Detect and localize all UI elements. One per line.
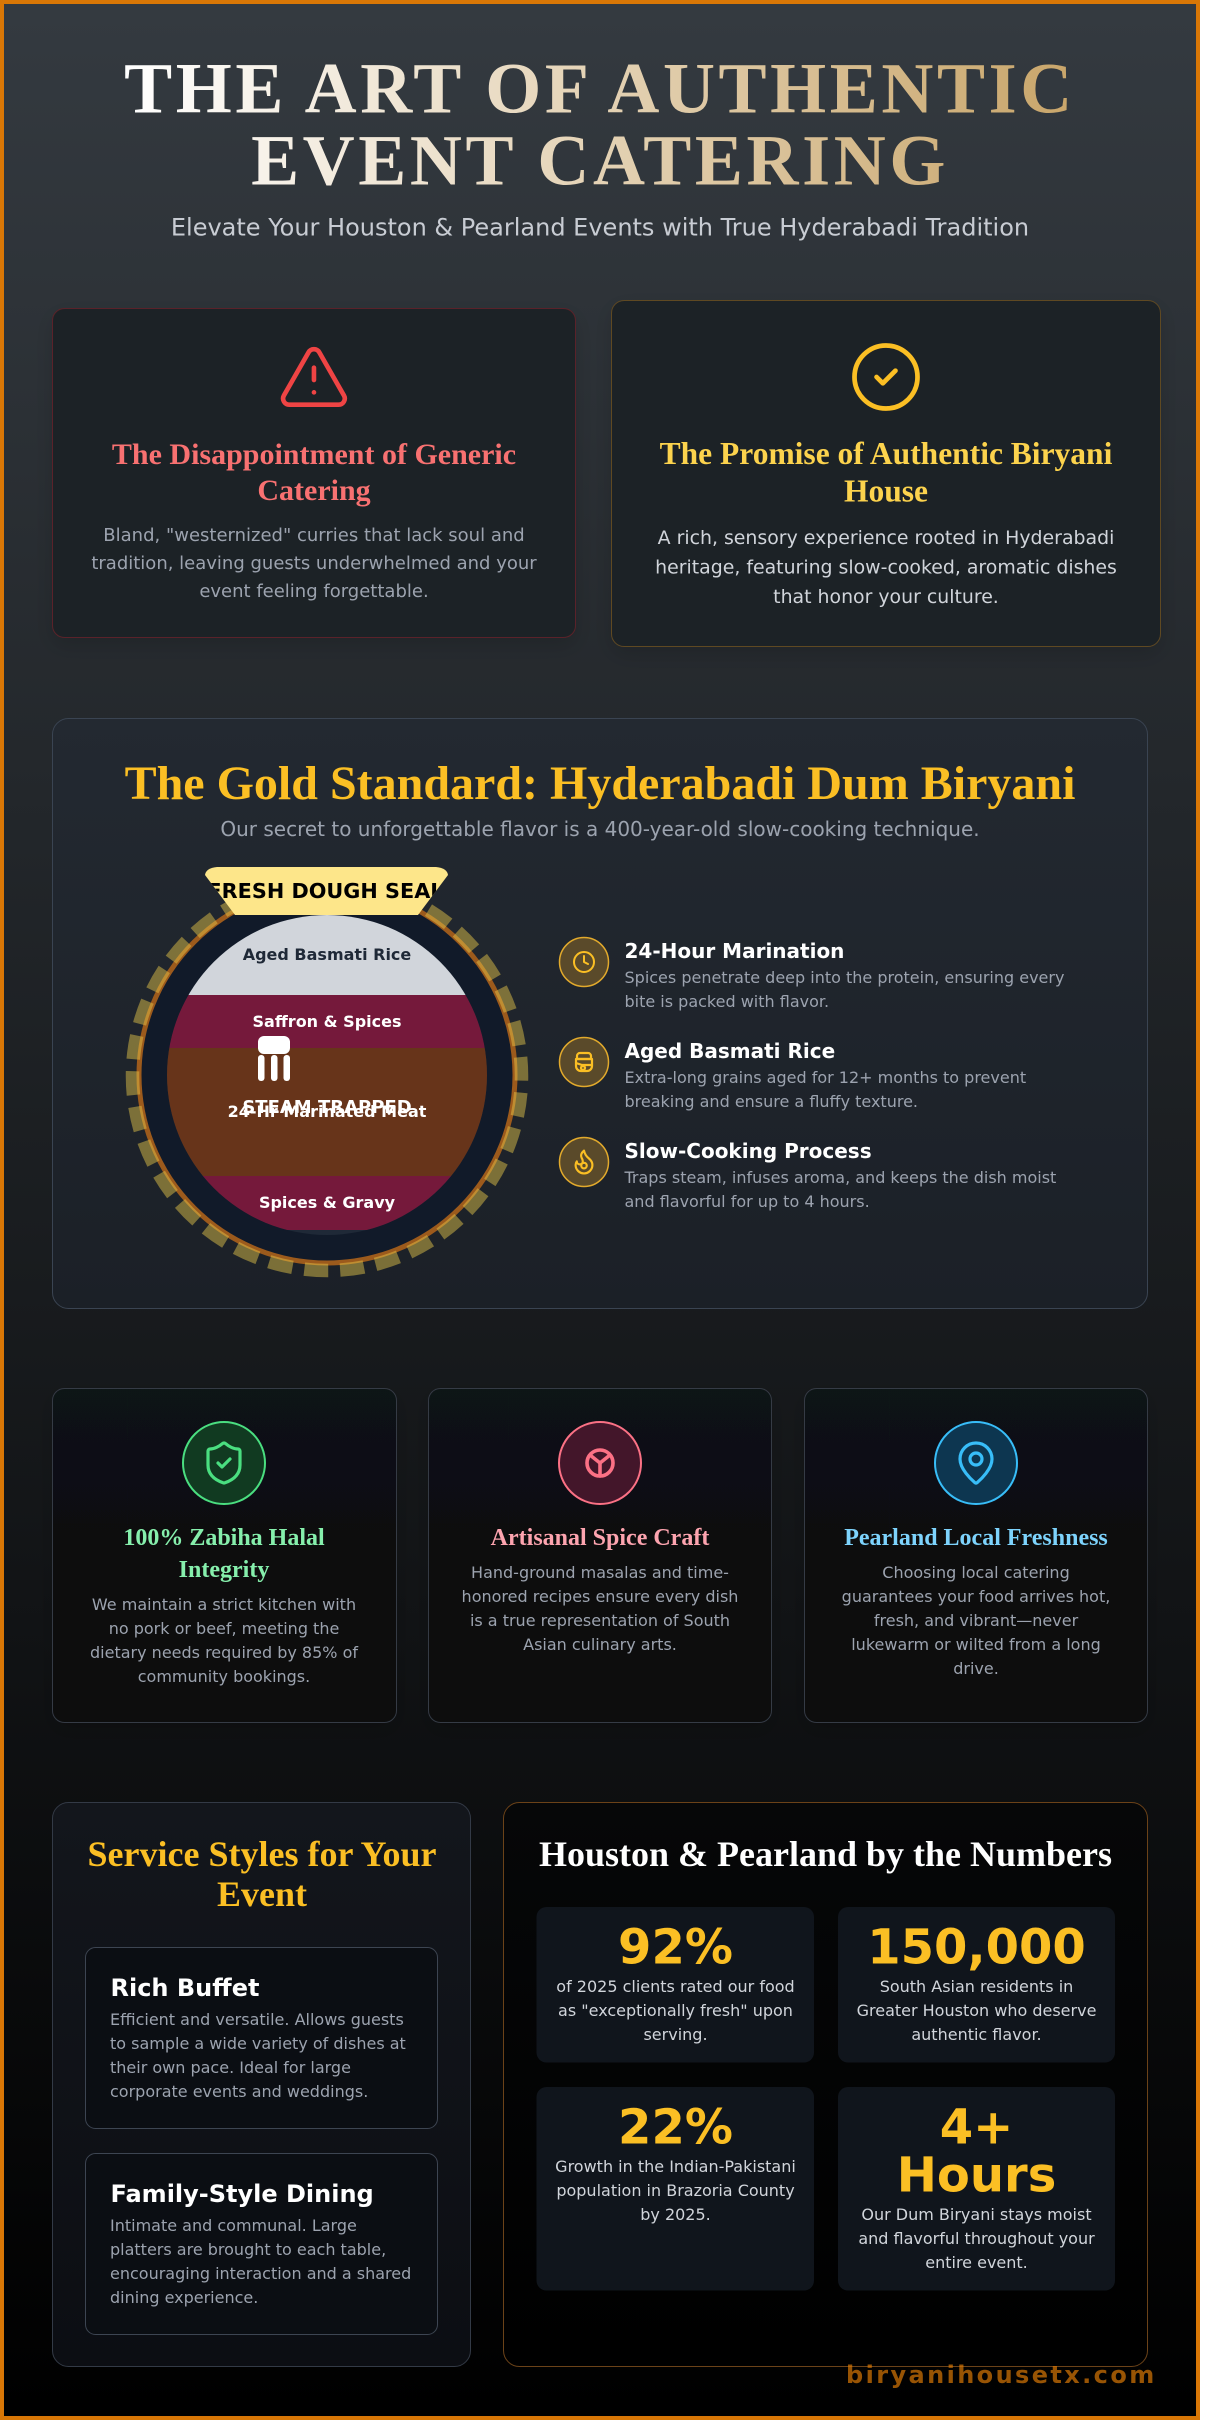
layer label: saffron: Saffron & Spices [253, 1012, 401, 1031]
stat: 22%: Growth in the Indian-Pakistani [555, 2157, 796, 2176]
icon: spice [559, 1422, 641, 1504]
heading: service styles: Event [217, 1874, 307, 1914]
icon: steam [258, 1036, 290, 1081]
stat: 150,000: Greater Houston who deserve [857, 2001, 1096, 2020]
label: steam trapped: STEAM TRAPPED [242, 1097, 412, 1118]
feature title: Slow-Cooking Process [624, 1139, 872, 1163]
layer label: gravy: Spices & Gravy [259, 1193, 396, 1212]
card: family-style dining: Family-Style Dining [110, 2180, 374, 2208]
card: family-style dining: encouraging interaction and a shared [110, 2264, 411, 2283]
stat: 22%: 22% [618, 2100, 733, 2156]
feature text: bite is packed with flavor. [624, 992, 829, 1011]
stat: 92%: of 2025 clients rated our food [556, 1977, 795, 1996]
stat: 92%: 92% [618, 1920, 733, 1976]
food layers [167, 915, 487, 1235]
heading: service styles: Service Styles for Your [88, 1834, 436, 1874]
layer label: rice: Aged Basmati Rice [243, 945, 411, 964]
stat: 4+ hours [838, 2087, 1115, 2290]
text: spice body: Hand-ground masalas and time- [471, 1563, 729, 1582]
feature text: Spices penetrate deep into the protein, ensuring every [624, 968, 1064, 987]
heading: disappointment: The Disappointment of Generic [112, 438, 516, 471]
card: family-style dining: Intimate and communal. Large [110, 2216, 357, 2235]
text: halal body: community bookings. [138, 1667, 310, 1686]
icon: map pin [935, 1422, 1017, 1504]
feature: slow-cooking process [560, 1138, 1056, 1211]
feature title: 24-Hour Marination [624, 939, 844, 963]
text: freshness body: lukewarm or wilted from a long [851, 1635, 1101, 1654]
text: freshness body: guarantees your food arrives hot, [842, 1587, 1110, 1606]
feature: 24-hour marination [560, 938, 1064, 1011]
heading: gold standard: The Gold Standard: Hyderabadi Dum Biryani [125, 757, 1075, 810]
diagram: biryani pot cross-section [132, 867, 522, 1270]
text: freshness body: fresh, and vibrant—never [874, 1611, 1079, 1630]
text: promise body: heritage, featuring slow-cooked, aromatic dishes [655, 556, 1117, 578]
heading: promise: The Promise of Authentic Biryani [660, 436, 1113, 471]
stat: 4+ hours: and flavorful throughout your [858, 2229, 1095, 2248]
feature: aged basmati rice [560, 1038, 1026, 1111]
stat: 150,000 [838, 1907, 1115, 2062]
icon: rice bowl [560, 1038, 608, 1086]
dough seal: FRESH DOUGH SEAL [207, 879, 444, 903]
heading: freshness: Pearland Local Freshness [844, 1525, 1108, 1551]
icon: clock [560, 938, 608, 986]
text: disappointment body: Bland, "westernized" curries that lack soul and [103, 525, 525, 546]
text: halal body: no pork or beef, meeting the [109, 1619, 339, 1638]
text: spice body: honored recipes ensure every dish [462, 1587, 738, 1606]
panel: houston and pearland by the numbers [504, 1802, 1148, 2366]
stat: 92% [536, 1907, 814, 2062]
panel: the gold standard [52, 718, 1148, 1308]
text: disappointment body: tradition, leaving guests underwhelmed and your [91, 553, 537, 574]
feature text: Extra-long grains aged for 12+ months to prevent [624, 1068, 1026, 1087]
panel: the disappointment of generic catering [52, 308, 576, 638]
icon: warning triangle [283, 349, 345, 405]
title [124, 48, 1076, 200]
stat: 150,000: 150,000 [867, 1920, 1086, 1976]
heading: spice craft: Artisanal Spice Craft [491, 1525, 709, 1551]
title: EVENT CATERING [251, 120, 949, 200]
stat: 150,000: authentic flavor. [911, 2025, 1042, 2044]
dough seal [205, 867, 448, 915]
card: family-style dining [86, 2154, 438, 2334]
panel: artisanal spice craft [428, 1388, 772, 1722]
stat: 150,000: South Asian residents in [880, 1977, 1073, 1996]
text: spice body: Asian culinary arts. [523, 1635, 677, 1654]
icon: check circle [854, 346, 918, 408]
card: rich buffet: Efficient and versatile. Allows guests [110, 2010, 404, 2029]
card: rich buffet [86, 1948, 438, 2128]
stat: 4+ hours: Hours [897, 2148, 1056, 2204]
panel: pearland local freshness [804, 1388, 1148, 1722]
footer: website: biryanihousetx.com [846, 2361, 1157, 2389]
text: freshness body: drive. [953, 1659, 999, 1678]
title: THE ART OF AUTHENTIC [124, 48, 1076, 128]
feature text: breaking and ensure a fluffy texture. [624, 1092, 918, 1111]
text: freshness body: Choosing local catering [882, 1563, 1070, 1582]
text: halal body: We maintain a strict kitchen with [92, 1595, 356, 1614]
text: disappointment body: event feeling forgettable. [199, 581, 429, 602]
card: rich buffet: their own pace. Ideal for large [110, 2058, 351, 2077]
feature text: Traps steam, infuses aroma, and keeps the dish moist [624, 1168, 1056, 1187]
heading: halal: 100% Zabiha Halal [123, 1525, 325, 1551]
dashed steam ring [132, 882, 522, 1270]
card: rich buffet: Rich Buffet [110, 1974, 259, 2002]
text: spice body: is a true representation of South [470, 1611, 730, 1630]
text: promise body: A rich, sensory experience rooted in Hyderabadi [658, 527, 1114, 549]
card: family-style dining: platters are brought to each table, [110, 2240, 386, 2259]
text: halal body: dietary needs required by 85% of [90, 1643, 358, 1662]
panel: 100% zabiha halal integrity [52, 1388, 396, 1722]
icon: shield check [183, 1422, 265, 1504]
stat: 4+ hours: entire event. [925, 2253, 1028, 2272]
layer label: meat: 24-Hr Marinated Meat [228, 1102, 427, 1121]
stat: 22% [536, 2087, 814, 2290]
heading: by the numbers: Houston & Pearland by the Numbers [539, 1834, 1112, 1874]
stat: 4+ hours: 4+ [940, 2100, 1013, 2156]
panel: the promise of authentic biryani house [612, 300, 1160, 646]
stat: 22%: population in Brazoria County [556, 2181, 795, 2200]
text: promise body: that honor your culture. [773, 586, 999, 608]
icon: flame [560, 1138, 608, 1186]
heading: disappointment: Catering [257, 474, 371, 507]
text: gold standard subtitle: Our secret to unforgettable flavor is a 400-year-old slow-cooking technique. [220, 817, 980, 841]
heading: promise: House [844, 474, 928, 508]
pot body [139, 887, 515, 1263]
card: rich buffet: to sample a wide variety of dishes at [110, 2034, 406, 2053]
card: family-style dining: dining experience. [110, 2288, 258, 2307]
stat: 92%: as "exceptionally fresh" upon [558, 2001, 793, 2020]
feature title: Aged Basmati Rice [624, 1039, 835, 1063]
stat: 92%: serving. [643, 2025, 708, 2044]
stat: 22%: by 2025. [640, 2205, 711, 2224]
heading: halal: Integrity [179, 1557, 269, 1583]
stat: 4+ hours: Our Dum Biryani stays moist [861, 2205, 1092, 2224]
feature text: and flavorful for up to 4 hours. [624, 1192, 870, 1211]
card: rich buffet: corporate events and weddings. [110, 2082, 368, 2101]
panel: service styles [52, 1802, 470, 2366]
subtitle: Elevate Your Houston & Pearland Events with True Hyderabadi Tradition [171, 214, 1029, 242]
